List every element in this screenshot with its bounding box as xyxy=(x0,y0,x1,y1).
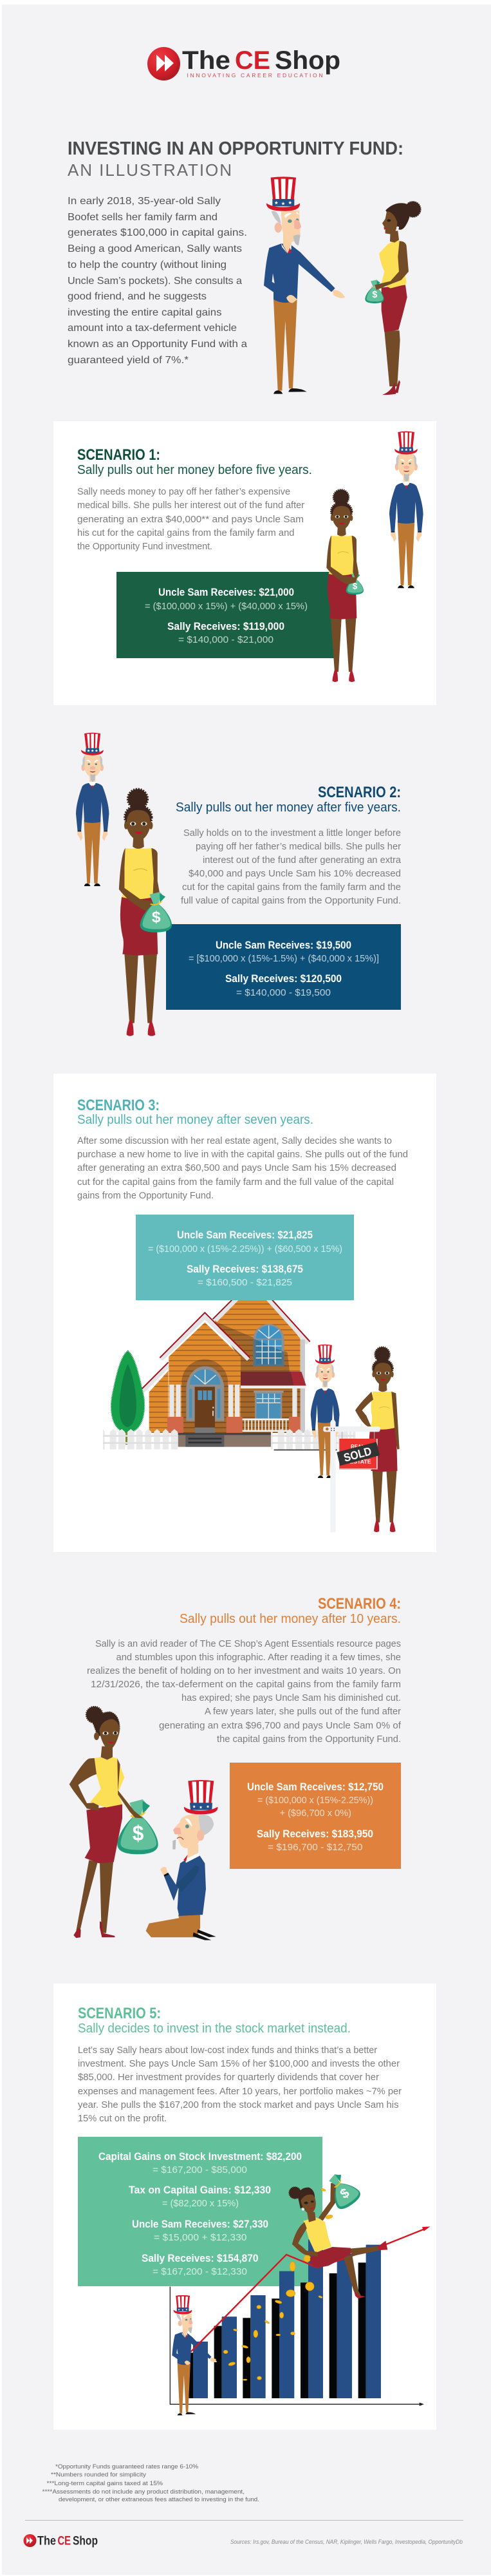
coins xyxy=(211,2188,333,2380)
intro text xyxy=(68,196,247,366)
illustration: Sally riding the trend line xyxy=(289,2183,387,2298)
heading: scenario 2: Sally pulls out her money after five years. xyxy=(176,800,401,815)
result box: scenario 4: Sally Receives: $183,950 xyxy=(257,1828,373,1840)
result box: scenario 5: = $15,000 + $12,330 xyxy=(154,2232,247,2243)
heading: scenario 3: SCENARIO 3: xyxy=(77,1097,160,1114)
result box: scenario 4: = $196,700 - $12,750 xyxy=(268,1842,363,1853)
footer logo: The CE Shop: CE xyxy=(58,2535,71,2548)
text: scenario 1 xyxy=(77,486,304,552)
illustration: house xyxy=(103,1279,355,1450)
logo: The CE Shop xyxy=(147,46,340,80)
title: INVESTING IN AN OPPORTUNITY FUND: xyxy=(68,138,403,159)
text: scenario 5: 15% cut on the profit. xyxy=(78,2114,167,2124)
heading: scenario 5: Sally decides to invest in the stock market instead. xyxy=(78,2022,351,2036)
result box: scenario 1: = $140,000 - $21,000 xyxy=(178,634,273,645)
heading: scenario 4: SCENARIO 4: xyxy=(318,1595,401,1613)
illustration: Uncle Sam offering hand xyxy=(264,176,346,394)
sold sign: SOLD xyxy=(342,1444,373,1464)
intro text: known as an Opportunity Fund with a xyxy=(68,339,247,350)
result box: scenario 5: = ($82,200 x 15%) xyxy=(162,2198,239,2209)
illustration: Uncle Sam kneeling xyxy=(146,1780,218,1940)
intro text: guaranteed yield of 7%.* xyxy=(68,355,189,366)
fence: right xyxy=(271,1429,346,1450)
logo: The CE Shop: The xyxy=(182,46,230,75)
result box: scenario 4: = ($100,000 x (15%-2.25%)) xyxy=(257,1795,373,1806)
section: scenario 4 xyxy=(69,1595,402,1940)
result box: scenario 2: = $140,000 - $19,500 xyxy=(236,987,331,998)
result box: scenario 5 xyxy=(78,2137,322,2286)
icon: money bag xyxy=(321,2168,363,2212)
result box: scenario 1: Uncle Sam Receives: $21,000 xyxy=(158,586,294,598)
text: scenario 3: cut for the capital gains from the family farm and the full value of the capital xyxy=(77,1177,394,1188)
illustration: Uncle Sam front xyxy=(76,733,109,886)
result box: scenario 2: Sally Receives: $120,500 xyxy=(225,972,342,985)
text: scenario 4: Sally is an avid reader of The CE Shop’s Agent Essentials resource pages xyxy=(95,1639,401,1649)
text: scenario 5: Let’s say Sally hears about low-cost index funds and thinks that’s a better xyxy=(78,2045,377,2056)
result box: scenario 2: = [$100,000 x (15%-1.5%) + ($40,000 x 15%)] xyxy=(189,953,379,964)
text: scenario 5: investment. She pays Uncle Sam 15% of her $100,000 and invests the other xyxy=(78,2059,400,2069)
text: scenario 3: gains from the Opportunity Fund. xyxy=(77,1191,214,1201)
result box: scenario 4: + ($96,700 x 0%) xyxy=(279,1808,351,1819)
result box: scenario 1: = ($100,000 x 15%) + ($40,000 x 15%) xyxy=(145,601,308,612)
text: scenario 5: expenses and management fees. After 10 years, her portfolio makes ~7% per xyxy=(78,2087,402,2097)
result box: scenario 5: = $167,200 - $85,000 xyxy=(153,2164,247,2175)
result box: scenario 1 xyxy=(116,572,338,658)
text: scenario 4: and stumbles upon this infographic. After reading it a few times, she xyxy=(116,1653,401,1663)
icon: money bag xyxy=(140,892,172,933)
sold sign xyxy=(323,1419,380,1532)
result box: scenario 4 xyxy=(230,1763,401,1869)
footnotes: development, or other extraneous fees attached to investing in the fund. xyxy=(59,2496,259,2503)
intro text: Boofet sells her family farm and xyxy=(68,212,218,223)
result box: scenario 3 xyxy=(136,1215,354,1300)
text: scenario 3: after generating an extra $60,500 and pays Uncle Sam his 15% decreased xyxy=(77,1163,396,1173)
heading: scenario 1 xyxy=(77,446,312,477)
text: scenario 2: interest out of the fund after generating an extra xyxy=(203,855,402,866)
result box: scenario 3: = ($100,000 x (15%-2.25%)) + ($60,500 x 15%) xyxy=(148,1244,342,1255)
heading: scenario 2: SCENARIO 2: xyxy=(318,784,401,801)
illustration: tree xyxy=(111,1351,144,1444)
intro text: Being a good American, Sally wants xyxy=(68,243,242,254)
intro text: Uncle Sam’s pockets). She consults a xyxy=(68,276,242,287)
panel: scenario 5 xyxy=(53,1984,436,2430)
text: scenario 4: has expired; she pays Uncle Sam his diminished cut. xyxy=(181,1693,401,1703)
result box: scenario 3: = $160,500 - $21,825 xyxy=(198,1277,292,1288)
result box: scenario 5: Sally Receives: $154,870 xyxy=(142,2252,259,2264)
heading: scenario 3: Sally pulls out her money after seven years. xyxy=(77,1113,313,1127)
result box: scenario 5: Uncle Sam Receives: $27,330 xyxy=(132,2218,268,2230)
result box: scenario 5: Tax on Capital Gains: $12,330 xyxy=(129,2184,271,2196)
intro text: generates $100,000 in capital gains. xyxy=(68,227,247,238)
text: scenario 4: realizes the benefit of holding on to her investment and waits 10 years. On xyxy=(87,1666,401,1676)
footnotes: *Opportunity Funds guaranteed rates range 6-10% xyxy=(55,2463,199,2470)
bar chart: stock growth xyxy=(170,2188,424,2406)
intro text: good friend, and he suggests xyxy=(68,291,207,302)
title: AN ILLUSTRATION xyxy=(68,160,232,180)
heading: scenario 4: Sally pulls out her money after 10 years. xyxy=(180,1612,401,1626)
illustration: Sally, hand on hip, holding money bag xyxy=(69,1707,158,1938)
result box: scenario 1: Sally Receives: $119,000 xyxy=(167,620,284,632)
result box: scenario 5: = $167,200 - $12,330 xyxy=(153,2266,247,2277)
footnotes: ****Assessments do not include any product distribution, management, xyxy=(42,2488,245,2496)
text: scenario 3 xyxy=(77,1136,408,1201)
footer logo: The CE Shop xyxy=(23,2534,98,2548)
intro text: amount into a tax-deferment vehicle xyxy=(68,323,237,334)
logo: The CE Shop: CE xyxy=(235,46,270,75)
fence: right extension xyxy=(324,1429,355,1450)
logo: The CE Shop: Shop xyxy=(275,46,340,75)
text: scenario 1: Sally needs money to pay off her father’s expensive xyxy=(77,486,290,497)
text: scenario 2: full value of capital gains from the Opportunity Fund. xyxy=(181,895,401,906)
text: scenario 1: medical bills. She pulls her interest out of the fund after xyxy=(77,500,304,511)
footer logo: The CE Shop: Shop xyxy=(73,2535,98,2548)
text: scenario 2: cut for the capital gains from the family farm and the xyxy=(182,882,401,893)
footer logo: The CE Shop: The xyxy=(37,2535,56,2548)
title xyxy=(68,138,403,180)
heading: scenario 1: Sally pulls out her money before five years. xyxy=(77,463,312,477)
result box: scenario 3: Uncle Sam Receives: $21,825 xyxy=(177,1229,313,1241)
sources: Sources: Irs.gov, Bureau of the Census, NAR, Kiplinger, Wells Fargo, Investopedia, OpportunityDb xyxy=(230,2539,463,2546)
heading: scenario 4 xyxy=(180,1595,401,1626)
text: scenario 3: purchase a new home to live in with the capital gains. She pulls out of the fund xyxy=(77,1150,408,1160)
illustration: Uncle Sam front xyxy=(389,431,423,588)
text: scenario 2: $40,000 and pays Uncle Sam his 10% decreased xyxy=(189,868,401,879)
text: scenario 4: 12/31/2026, the tax-deferment on the capital gains from the family farm xyxy=(91,1680,401,1690)
heading: scenario 5: SCENARIO 5: xyxy=(78,2005,161,2022)
text: scenario 3: After some discussion with her real estate agent, Sally decides she wants to xyxy=(77,1136,392,1146)
sold sign: REAL xyxy=(351,1443,365,1450)
section: scenario 2 xyxy=(76,733,402,1036)
panel: scenario 1 xyxy=(53,421,436,705)
result box: scenario 2 xyxy=(166,924,401,1010)
heading: scenario 5 xyxy=(78,2005,351,2036)
heading: scenario 3 xyxy=(77,1097,313,1127)
result box: scenario 4: Uncle Sam Receives: $12,750 xyxy=(247,1781,384,1793)
text: scenario 1: generating an extra $40,000** and pays Uncle Sam xyxy=(77,514,304,525)
text: scenario 4: generating an extra $96,700 and pays Uncle Sam 0% of xyxy=(159,1721,402,1731)
text: scenario 4 xyxy=(87,1639,402,1745)
footnotes: ***Long-term capital gains taxed at 15% xyxy=(46,2480,163,2487)
intro text: investing the entire capital gains xyxy=(68,307,221,318)
sold sign: ESTATE xyxy=(349,1459,371,1465)
result box: scenario 2: Uncle Sam Receives: $19,500 xyxy=(216,939,351,951)
footnotes xyxy=(42,2463,259,2503)
illustration: Sally front xyxy=(326,489,364,682)
panel: scenario 3 xyxy=(53,1074,436,1552)
illustration: Sally, hand on hip xyxy=(355,1347,400,1532)
footnotes: **Numbers rounded for simplicity xyxy=(51,2472,146,2478)
text: scenario 4: the capital gains from the Opportunity Fund. xyxy=(217,1734,401,1745)
fence: left xyxy=(103,1429,178,1450)
illustration: Uncle Sam beside chart xyxy=(172,2295,217,2415)
illustration: Sally holding money bag, profile xyxy=(365,202,421,395)
intro text: to help the country (without lining xyxy=(68,260,227,270)
text: scenario 2: Sally holds on to the investment a little longer before xyxy=(183,828,401,838)
result box: scenario 3: Sally Receives: $138,675 xyxy=(187,1263,303,1275)
result box: scenario 5: Capital Gains on Stock Investment: $82,200 xyxy=(98,2150,302,2163)
text: scenario 5: $85,000. Her investment provides for quarterly dividends that cover her xyxy=(78,2072,379,2083)
text: scenario 5 xyxy=(78,2045,402,2124)
text: scenario 2: paying off her father’s medical bills. She pulls her xyxy=(196,841,401,852)
text: scenario 1: his cut for the capital gains from the family farm and xyxy=(77,527,295,538)
logo: The CE Shop: INNOVATING CAREER EDUCATION xyxy=(187,72,323,79)
illustration: Sally front with money bag xyxy=(119,789,160,1036)
text: scenario 1: the Opportunity Fund investment. xyxy=(77,541,212,552)
text: scenario 5: year. She pulls the $167,200 from the stock market and pays Uncle Sam his xyxy=(78,2100,399,2110)
heading: scenario 2 xyxy=(176,784,401,815)
heading: scenario 1: SCENARIO 1: xyxy=(77,446,160,464)
text: scenario 4: A few years later, she pulls out of the fund after xyxy=(205,1707,401,1717)
intro text: In early 2018, 35-year-old Sally xyxy=(68,196,221,207)
text: scenario 2 xyxy=(181,828,402,906)
illustration: Uncle Sam front xyxy=(311,1345,340,1478)
arrow: rising trend line xyxy=(191,2226,430,2352)
